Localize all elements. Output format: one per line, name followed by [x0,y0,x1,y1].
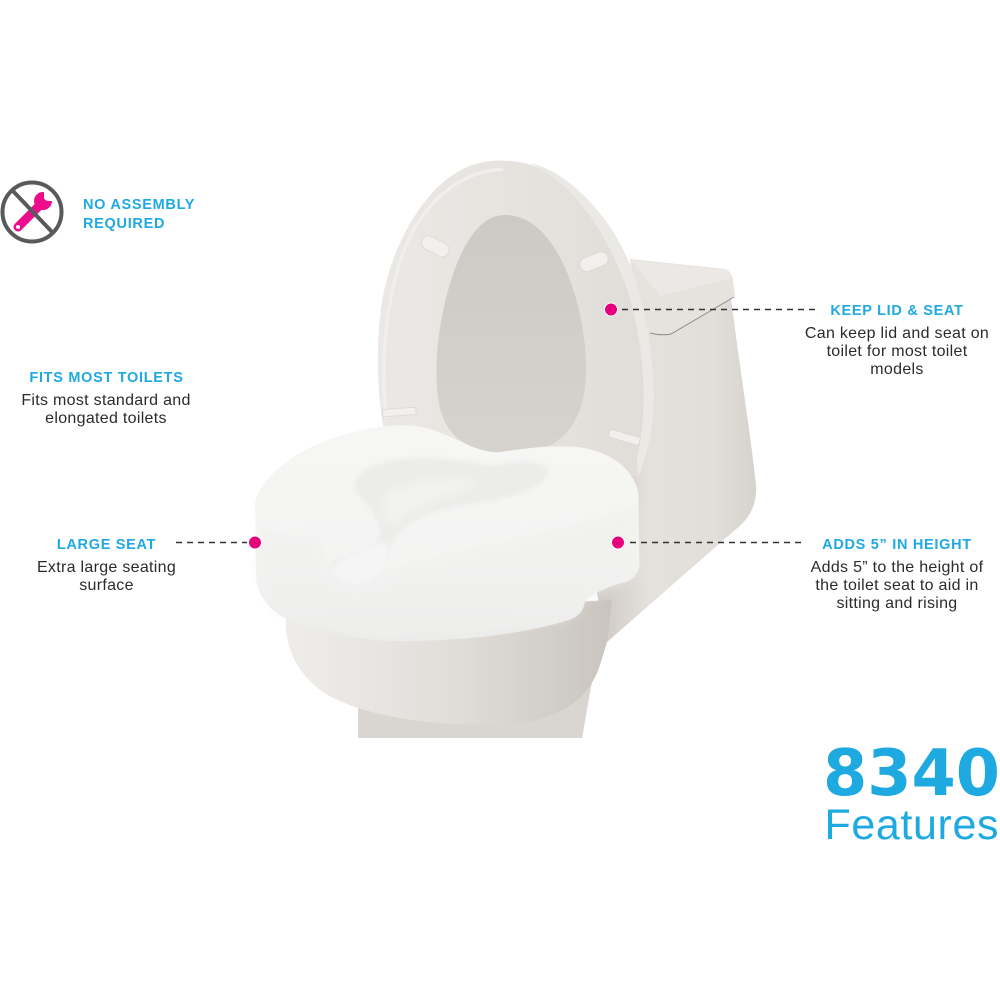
raised lid [378,161,654,477]
heading: no assembly required [83,197,195,232]
toilet bowl and pedestal [286,600,612,738]
callout: fits most toilets [21,370,191,427]
callout: adds 5 inches in height [811,537,984,612]
icon: pink wrench [16,190,57,229]
callout: keep lid and seat: models [870,361,924,378]
heading: no assembly required: REQUIRED [83,216,165,232]
icon: no tools required [2,182,62,242]
heading: no assembly required: NO ASSEMBLY [83,197,195,213]
callout: adds 5 inches in height: Adds 5” to the height of [811,559,984,576]
lid opening [436,215,586,453]
callout: fits most toilets: Fits most standard and [21,392,191,409]
lid bumpers [382,233,640,445]
title: 8340 features: Features [824,801,998,849]
toilet tank and body [590,259,756,642]
callout: fits most toilets: FITS MOST TOILETS [29,370,184,386]
callout: keep lid and seat [805,303,989,378]
callout: adds 5 inches in height: ADDS 5” IN HEIGHT [822,537,972,553]
callout: adds 5 inches in height: sitting and rising [836,595,958,612]
callout: adds 5 inches in height: the toilet seat to aid in [815,577,979,594]
seat side shading [256,507,638,641]
pointer: adds height [612,536,803,549]
pointer: keep lid and seat [604,303,820,316]
callout: large seat: LARGE SEAT [57,537,156,553]
pointer: large seat [176,536,262,549]
callout: fits most toilets: elongated toilets [45,410,167,427]
title: 8340 features [823,737,1000,849]
illustration: toilet with raised seat [255,161,756,738]
callout: large seat: Extra large seating [37,559,176,576]
callout: keep lid and seat: Can keep lid and seat on [805,325,989,342]
front notch highlight [330,542,389,585]
callout: large seat: surface [79,577,134,594]
white foam riser seat [255,425,639,641]
callout: keep lid and seat: toilet for most toilet [827,343,968,360]
callout: large seat [37,537,176,594]
callout: keep lid and seat: KEEP LID & SEAT [830,303,964,319]
seat opening [330,458,548,586]
title: 8340 features: 8340 [823,737,1000,811]
